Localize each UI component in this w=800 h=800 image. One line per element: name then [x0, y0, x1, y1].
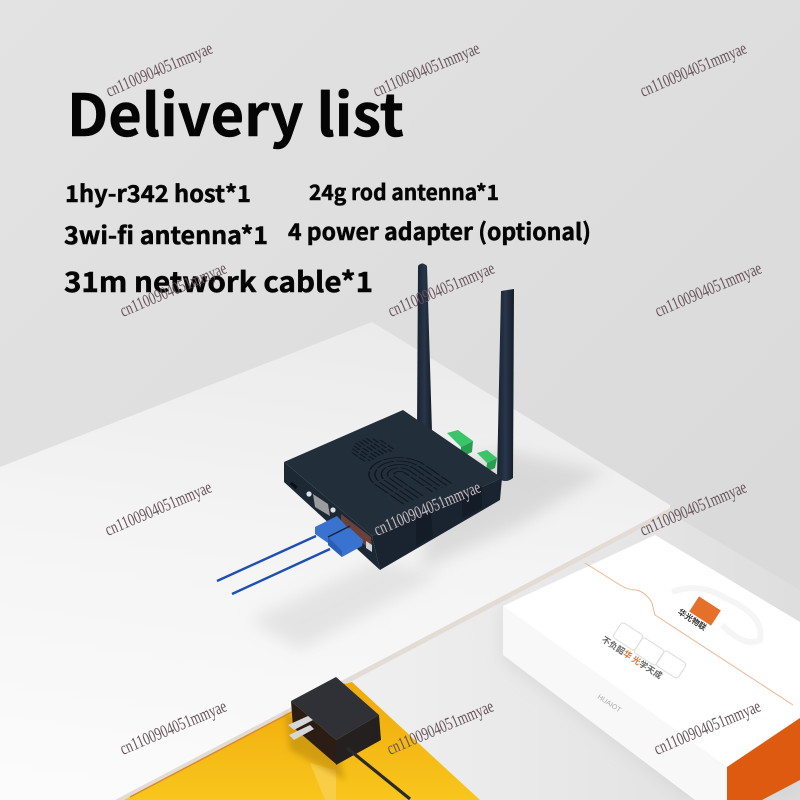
icon: power adapter: [285, 677, 410, 799]
watermarks: cn1100904051mmyae: [384, 696, 497, 759]
watermarks: cn1100904051mmyae: [117, 258, 230, 321]
item: wi-fi antenna: 3wi-fi antenna*1: [64, 216, 268, 251]
title: Delivery list: [67, 69, 404, 153]
adapter right face: [336, 715, 381, 765]
box slogan: 不负韶华 光学天成: [599, 633, 665, 682]
green terminals: [447, 430, 497, 472]
watermarks: cn1100904051mmyae: [103, 38, 216, 101]
gap between plugs: [328, 526, 350, 537]
router left face: [284, 462, 380, 570]
box logo: 华光物联: [676, 607, 708, 633]
router DB9 port: [313, 494, 330, 516]
right antenna: [497, 289, 514, 481]
box icons: [612, 622, 687, 679]
orange box side: [727, 718, 800, 800]
left antenna: [417, 264, 432, 432]
box top face: [503, 535, 800, 767]
antennas: [417, 264, 514, 481]
white platform: [0, 322, 670, 800]
box brand: HUAIOT: [596, 694, 623, 714]
box logo: [676, 591, 721, 635]
cable one: [217, 536, 316, 581]
box front face: [503, 606, 727, 800]
product box: [503, 535, 800, 800]
shadow behind router: [420, 450, 605, 570]
router DIN clips: [416, 486, 482, 546]
adapter cable: [347, 748, 410, 799]
router fingerprint vents: [331, 433, 451, 504]
router top face: [284, 410, 502, 536]
adapter plug prongs: [288, 716, 314, 740]
item: network cable: 31m network cable*1: [64, 261, 373, 301]
watermarks: cn1100904051mmyae: [385, 258, 498, 321]
blue plug one: [315, 516, 350, 543]
router right face: [372, 478, 502, 570]
network cables: [217, 516, 363, 594]
router LAN ports: [341, 514, 372, 548]
watermarks: [102, 38, 765, 759]
router: [284, 410, 502, 570]
shadow of cables: [250, 560, 440, 650]
watermarks: cn1100904051mmyae: [117, 696, 230, 759]
yellow acrylic sheet: [124, 682, 480, 800]
cable two: [232, 549, 330, 594]
item: host: 1hy-r342 host*1: [65, 175, 251, 209]
platform edge and lower surface: [100, 508, 800, 800]
router status lights: [306, 491, 336, 513]
blue plug two: [328, 528, 363, 557]
item: rod antenna: 24g rod antenna*1: [309, 177, 499, 207]
watermarks: cn1100904051mmyae: [102, 477, 215, 540]
watermarks: cn1100904051mmyae: [637, 38, 750, 101]
box cloud outline: [585, 563, 793, 705]
watermarks: cn1100904051mmyae: [370, 38, 483, 101]
watermarks: cn1100904051mmyae: [371, 477, 484, 540]
watermarks: cn1100904051mmyae: [637, 477, 750, 540]
adapter top face: [291, 677, 379, 740]
item: power adapter: 4 power adapter (optional): [288, 213, 591, 247]
adapter left face: [291, 701, 336, 764]
